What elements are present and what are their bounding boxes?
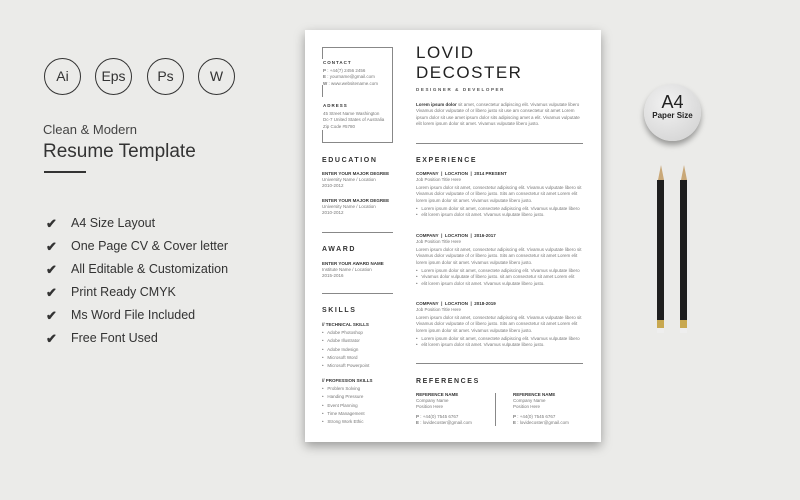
resume paper: • Adobe Illustrator	[322, 338, 360, 343]
resume paper: Institute Name / Location	[322, 267, 372, 272]
resume paper: University Name / Location	[322, 177, 376, 182]
resume paper: Lorem ipsum dolor sit amet, consectetur adipiscing elit. Vivamus vulputate libero sit	[416, 315, 582, 320]
badge: A4 paper size: A4	[661, 92, 684, 112]
resume paper: Company Name	[416, 398, 449, 403]
icon: Ps	[147, 58, 184, 95]
resume paper: lorem ipsum dolor sit amet. Vivamus vulputate libero justo.	[416, 260, 532, 265]
icon: Ai	[44, 58, 81, 95]
resume paper: • Microsoft Powerpoint	[322, 363, 369, 368]
resume paper: E : lovidecoster@gmail.com	[513, 420, 569, 425]
feature list: ✔	[46, 239, 57, 254]
resume paper: 2010-2012	[322, 210, 344, 215]
name heading: DECOSTER	[416, 63, 522, 82]
feature list: ✔	[46, 216, 57, 231]
item	[46, 239, 228, 254]
resume paper: Company Name	[513, 398, 546, 403]
resume paper: lorem ipsum dolor sit amet. Vivamus vulputate libero justo.	[416, 328, 532, 333]
resume paper: Dc-7 United States of Australia	[323, 117, 384, 122]
resume paper: P : +44(0) 7545 6767	[513, 414, 555, 419]
resume paper: 2010-2012	[322, 183, 344, 188]
item	[46, 285, 176, 300]
resume paper: Lorem ipsum dolor sit amet, consectetur adipiscing elit. Vivamus vulputate libero sit	[416, 247, 582, 252]
feature list: Ms Word File Included	[71, 308, 195, 322]
resume paper: ADRESS	[323, 103, 348, 108]
resume paper: Position Here	[513, 404, 540, 409]
resume paper: • Lorem ipsum dolor sit amet, consectete adipiscing elit. Vivamus vulputate libero	[416, 336, 580, 341]
feature list: All Editable & Customization	[71, 262, 228, 276]
feature list: ✔	[46, 308, 57, 323]
item	[46, 331, 158, 346]
name heading: LOVID	[416, 43, 475, 62]
contact box	[322, 47, 393, 143]
badge: A4 paper size	[644, 84, 701, 141]
resume paper: • Lorem ipsum dolor sit amet, consectete adipiscing elit. Vivamus vulputate libero	[416, 206, 580, 211]
resume paper: • Event Planning	[322, 403, 358, 408]
badge: A4 paper size: Paper Size	[652, 111, 693, 120]
resume paper: DESIGNER & DEVELOPER	[416, 87, 505, 92]
resume paper: • Handing Pressure	[322, 394, 363, 399]
icons: software formats	[44, 58, 235, 95]
resume paper: University Name / Location	[322, 204, 376, 209]
item	[46, 216, 155, 231]
feature list	[46, 216, 228, 346]
feature list: One Page CV & Cover letter	[71, 239, 228, 253]
resume paper: lorem ipsum dolor sit amet. Vivamus vulputate libero justo.	[416, 198, 532, 203]
resume paper: REFERENCE NAME	[416, 392, 458, 397]
resume paper: • elit lorem ipsum dolor sit amet. Vivamus vulputate libero justo.	[416, 342, 545, 347]
resume paper: // PROFESSION SKILLS	[322, 378, 373, 383]
resume paper: P : +44(0) 7545 6767	[416, 414, 458, 419]
references: REFERENCES	[416, 378, 480, 385]
resume paper: 2015-2016	[322, 273, 344, 278]
resume paper: REFERENCE NAME	[513, 392, 555, 397]
feature list: ✔	[46, 262, 57, 277]
resume paper: COMPANY | LOCATION | 2018-2019	[416, 301, 496, 306]
intro paragraph: ipsum dolor sit use amet ipsum dolor sits adipiscing amet a elit. Vivamus vulputate	[416, 115, 580, 120]
intro paragraph	[416, 102, 580, 126]
resume paper: • elit lorem ipsum dolor sit amet. Vivamus vulputate libero justo.	[416, 212, 545, 217]
feature list: A4 Size Layout	[71, 216, 155, 230]
resume paper: Zip Code #5780	[323, 124, 355, 129]
resume paper: Job Position Title Here	[416, 239, 461, 244]
icon: Eps	[95, 58, 132, 95]
subtitle: Clean & Modern	[43, 122, 137, 137]
resume paper: • Problem Solving	[322, 386, 360, 391]
experience: EXPERIENCE	[416, 157, 477, 164]
resume paper: E : yourname@gmail.com	[323, 74, 375, 79]
pencil 1	[657, 165, 664, 328]
contact text: CONTACT	[323, 60, 352, 65]
title: Resume Template	[43, 141, 196, 162]
resume paper: Lorem ipsum dolor sit amet, consectetur adipiscing elit. Vivamus vulputate libero sit	[416, 185, 582, 190]
feature list: ✔	[46, 285, 57, 300]
icon: Ps: Ps	[157, 68, 174, 84]
resume paper: Vivamus dolor vulputate of or libero justo. Sits am consectetur sit amet Lorem elit	[416, 253, 577, 258]
intro paragraph: Vivamus dolor vulputate of or libero justo sit use am consectetur sit amet Lorem	[416, 108, 574, 113]
resume paper: Job Position Title Here	[416, 307, 461, 312]
resume paper: COMPANY | LOCATION | 2014 PRESENT	[416, 171, 507, 176]
skills: SKILLS	[322, 307, 356, 314]
resume paper: Job Position Title Here	[416, 177, 461, 182]
intro paragraph: elit lorem ipsum dolor sit amet. Vivamus vulputate libero justo.	[416, 121, 539, 126]
resume paper: ENTER YOUR AWARD NAME	[322, 261, 384, 266]
resume paper: ENTER YOUR MAJOR DEGREE	[322, 198, 389, 203]
feature list: ✔	[46, 331, 57, 346]
item	[46, 262, 228, 277]
award: AWARD	[322, 246, 356, 253]
resume paper: Vivamus dolor vulputate of or libero justo. Sits am consectetur sit amet Lorem elit	[416, 321, 577, 326]
resume paper: 45 Street Name Washington	[323, 111, 379, 116]
icon: W: W	[210, 68, 223, 84]
icon: W	[198, 58, 235, 95]
resume paper: Position Here	[416, 404, 443, 409]
resume paper	[305, 30, 601, 442]
resume paper: COMPANY | LOCATION | 2016-2017	[416, 233, 496, 238]
pencil 2	[680, 165, 687, 328]
resume paper: E : lovidecoster@gmail.com	[416, 420, 472, 425]
resume paper: • Lorem ipsum dolor sit amet, consectete adipiscing elit. Vivamus vulputate libero	[416, 268, 580, 273]
resume paper: • Microsoft Word	[322, 355, 358, 360]
feature list: Print Ready CMYK	[71, 285, 176, 299]
resume paper: • Time Management	[322, 411, 365, 416]
icon: Eps: Eps	[101, 68, 126, 84]
resume paper: // TECHNICAL SKILLS	[322, 322, 369, 327]
education: EDUCATION	[322, 157, 378, 164]
resume paper: • Vivamus dolor vulputate of libero justo. sit am consectetur sit amet Lorem elit	[416, 274, 574, 279]
resume paper: • Adobe Indesign	[322, 347, 358, 352]
name heading	[416, 43, 522, 82]
feature list: Free Font Used	[71, 331, 158, 345]
pencils	[657, 165, 687, 328]
resume paper: W : www.websitename.com	[323, 81, 378, 86]
title underline	[44, 171, 86, 172]
icon: Ai: Ai	[56, 68, 69, 84]
resume paper: • Adobe Photoshop	[322, 330, 363, 335]
resume paper: • elit lorem ipsum dolor sit amet. Vivamus vulputate libero justo.	[416, 281, 545, 286]
resume paper: P : +44(7) 2456 2456	[323, 68, 365, 73]
intro paragraph: Lorem ipsum dolor sit amet, consectetur adipiscing elit. Vivamus vulputate libero	[416, 102, 579, 107]
item	[46, 308, 195, 323]
resume paper: Vivamus dolor vulputate of or libero justo. Sits am consectetur sit amet Lorem elit	[416, 191, 577, 196]
resume paper: • Strong Work Ethic	[322, 419, 364, 424]
resume paper: ENTER YOUR MAJOR DEGREE	[322, 171, 389, 176]
